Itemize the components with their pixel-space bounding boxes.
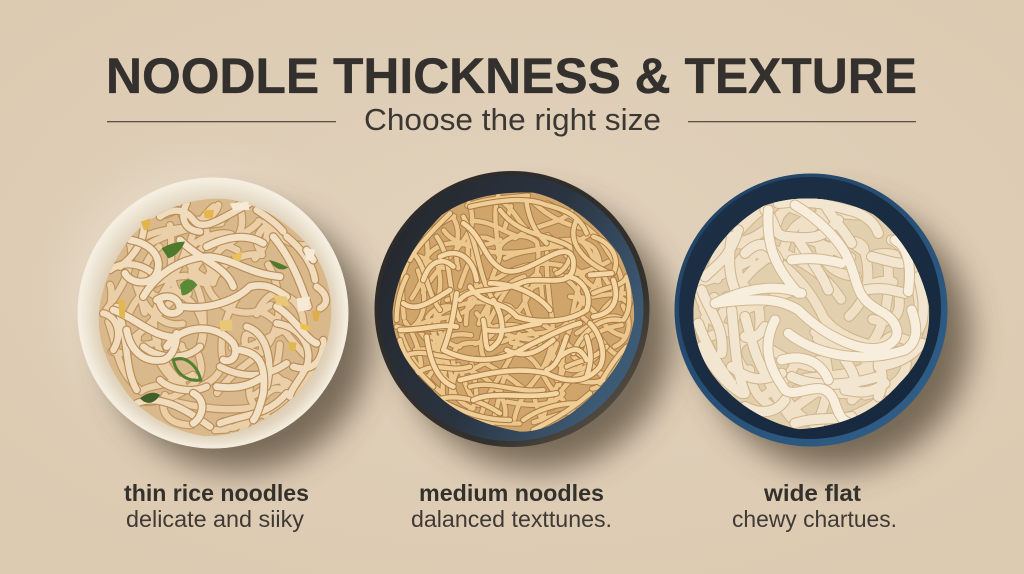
panel: medium noodles [348, 151, 674, 477]
title: NOODLE THICKNESS & TEXTURE [106, 48, 917, 104]
label: wide flat [732, 480, 897, 532]
navy bowl [674, 174, 948, 446]
thin rice noodle tangle [98, 198, 332, 436]
panel: wide flat noodles [668, 168, 970, 470]
label: thin rice noodles: thin rice noodles [124, 480, 309, 506]
dark ceramic bowl [374, 171, 650, 447]
panel: thin rice noodles [63, 165, 371, 471]
bowl shadow: wide flat noodles [702, 202, 970, 470]
subtitle with rules: Choose the right size [364, 102, 661, 137]
wide flat noodle tangle [693, 198, 930, 430]
bowl shadow: thin rice noodles [63, 165, 371, 471]
bowl shadow: medium noodles [402, 200, 672, 470]
label: medium noodles: dalanced texttunes. [411, 506, 612, 532]
label: thin rice noodles: delicate and siiky [126, 506, 305, 532]
green onions and egg bits [118, 202, 320, 403]
label: medium noodles [411, 480, 612, 532]
label: wide flat: chewy chartues. [732, 506, 897, 532]
cream bowl [78, 178, 348, 448]
label: medium noodles: medium noodles [419, 480, 604, 506]
label: thin rice noodles [124, 480, 309, 532]
medium noodle tangle [392, 192, 634, 432]
label: wide flat: wide flat [763, 480, 861, 506]
